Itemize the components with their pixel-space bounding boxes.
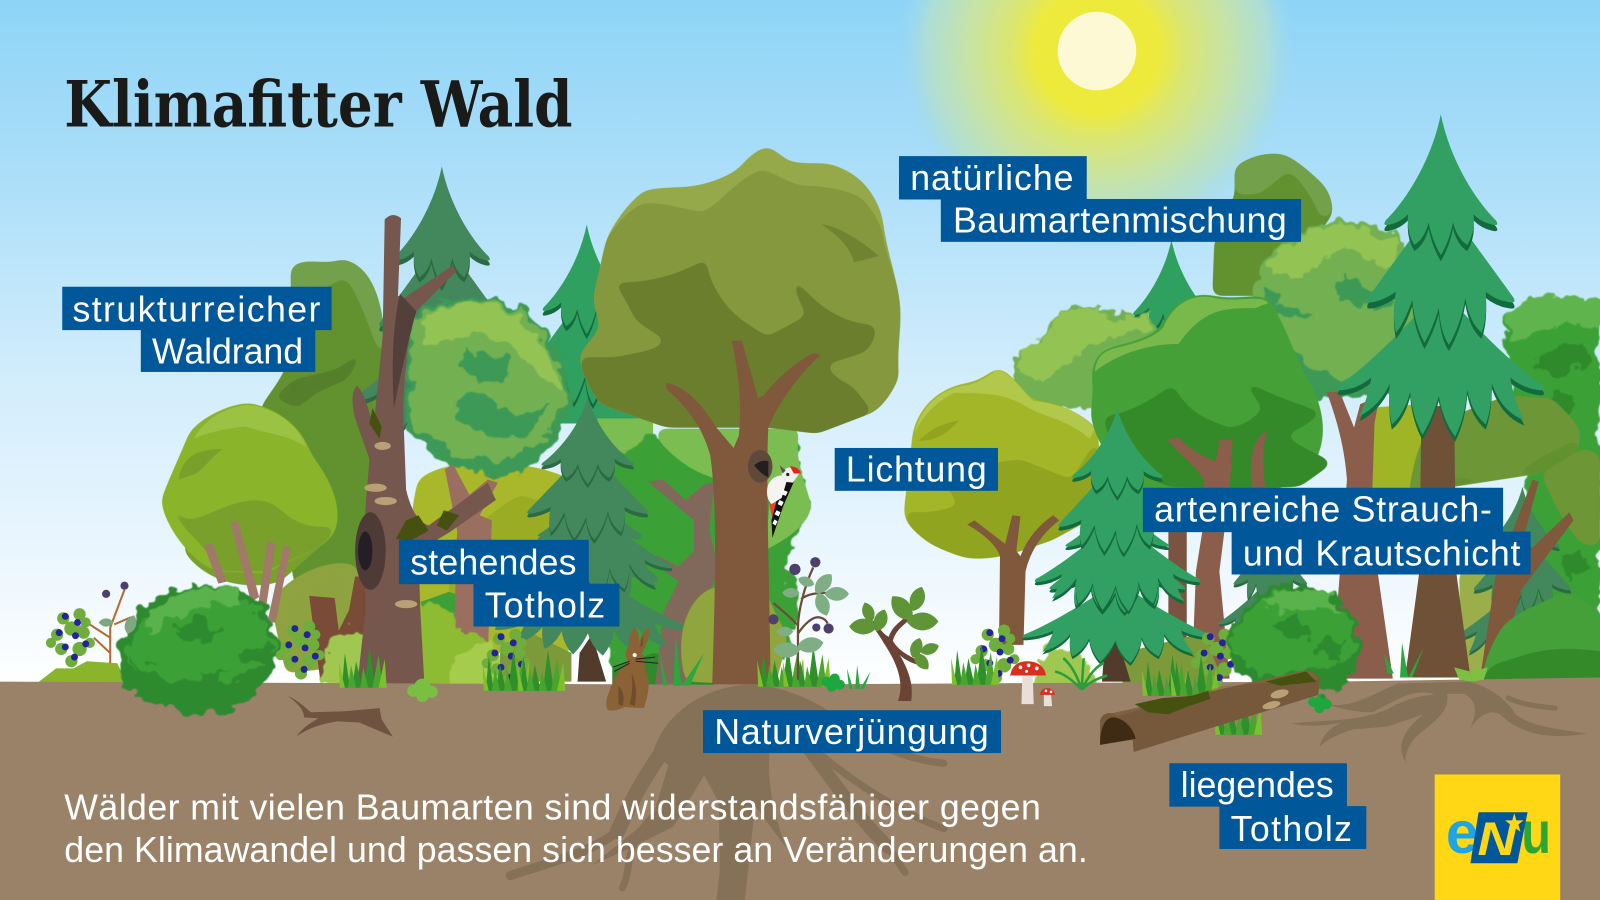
label: strukturreicher Waldrand: Waldrand (152, 331, 303, 371)
eNu logo: e (1446, 799, 1479, 866)
big spruce, right (1338, 114, 1544, 678)
label: artenreiche Strauch- und Krautschicht: und Krautschicht (1243, 533, 1520, 573)
dead branch on ground (288, 696, 393, 737)
spruce, centre right (1022, 408, 1212, 682)
roots, right (1291, 682, 1587, 765)
yellow-green patch behind right spruce (1362, 403, 1454, 510)
label: Naturverjüngung: Naturverjüngung (714, 712, 989, 752)
right edge tree (1503, 296, 1600, 653)
fern (1055, 658, 1107, 690)
pink-brown trunk behind labels (445, 464, 498, 663)
sky background (0, 0, 1600, 689)
olive tree, right (1408, 396, 1600, 546)
big spruce, centre left (495, 397, 685, 682)
lichtung tree (904, 368, 1107, 645)
dead standing tree (352, 215, 496, 686)
roots, centre (510, 685, 944, 900)
grass tufts (339, 635, 1423, 735)
lime tree, left (161, 403, 338, 622)
yellow-green tree behind (411, 462, 571, 653)
oak tree (580, 147, 900, 685)
label: natürliche Baumartenmischung (899, 156, 1301, 242)
back spruce, right (1101, 240, 1242, 463)
label: artenreiche Strauch- und Krautschicht: artenreiche Strauch- (1154, 489, 1492, 529)
description text: den Klimawandel und passen sich besser an Veränderungen an. (64, 830, 1088, 870)
back olive tree, right (1212, 154, 1333, 296)
label: liegendes Totholz: liegendes (1181, 765, 1334, 805)
sapling (849, 584, 941, 701)
fallen log (1100, 670, 1319, 752)
light green leafy tree, right (1242, 220, 1429, 403)
eNu logo: u (1521, 799, 1551, 866)
grey-brown tree behind oak (645, 480, 719, 686)
description text (64, 787, 1088, 870)
right shrub (1230, 584, 1361, 692)
label: stehendes Totholz: Totholz (485, 585, 605, 625)
label: liegendes Totholz: Totholz (1231, 809, 1352, 849)
woodpecker (767, 465, 801, 538)
light green leafy tree, left (403, 299, 571, 478)
far right bush (1481, 593, 1600, 704)
blueberry shrubs (46, 608, 1240, 688)
label: artenreiche Strauch- und Krautschicht (1143, 488, 1531, 574)
olive undergrowth, centre (1031, 633, 1224, 690)
label: stehendes Totholz: stehendes (410, 542, 577, 582)
brown tree, right (1327, 392, 1393, 679)
label: strukturreicher Waldrand (62, 287, 332, 372)
back light green tree (1010, 305, 1163, 408)
back spruce, hidden under label (1219, 500, 1322, 647)
label: natürliche Baumartenmischung: natürliche (910, 158, 1073, 198)
label: strukturreicher Waldrand: strukturreicher (72, 289, 321, 329)
olive bush behind oak trunk (681, 587, 788, 686)
label: stehendes Totholz (399, 540, 619, 627)
description text: Wälder mit vielen Baumarten sind widerstandsfähiger gegen (64, 787, 1041, 827)
label: Lichtung: Lichtung (846, 450, 987, 490)
label: natürliche Baumartenmischung: Baumartenmischung (953, 201, 1287, 241)
back spruce, far right (1454, 487, 1591, 667)
sun (898, 0, 1296, 250)
branching tree, far right (1480, 480, 1573, 682)
eNu logo: N (1478, 813, 1518, 865)
green bushes behind oak (597, 418, 811, 686)
ground (0, 678, 1600, 900)
eNu logo (1435, 774, 1560, 900)
spruce behind dead tree (354, 166, 530, 445)
undergrowth bushes behind dead tree (34, 607, 505, 690)
clovers (407, 667, 1488, 713)
mid-green tree (1091, 295, 1333, 679)
blackberry plant, centre (768, 557, 849, 680)
fly agaric mushrooms (1010, 661, 1055, 706)
label: liegendes Totholz (1169, 763, 1366, 849)
front bush, left (118, 585, 279, 714)
rabbit (606, 628, 658, 711)
pale olive undergrowth, far right (1459, 551, 1531, 682)
title: Klimafitter Wald (64, 68, 572, 142)
back olive tree, left (260, 259, 388, 682)
back spruce, centre left (542, 224, 640, 424)
blackberry plant, left (72, 582, 139, 663)
